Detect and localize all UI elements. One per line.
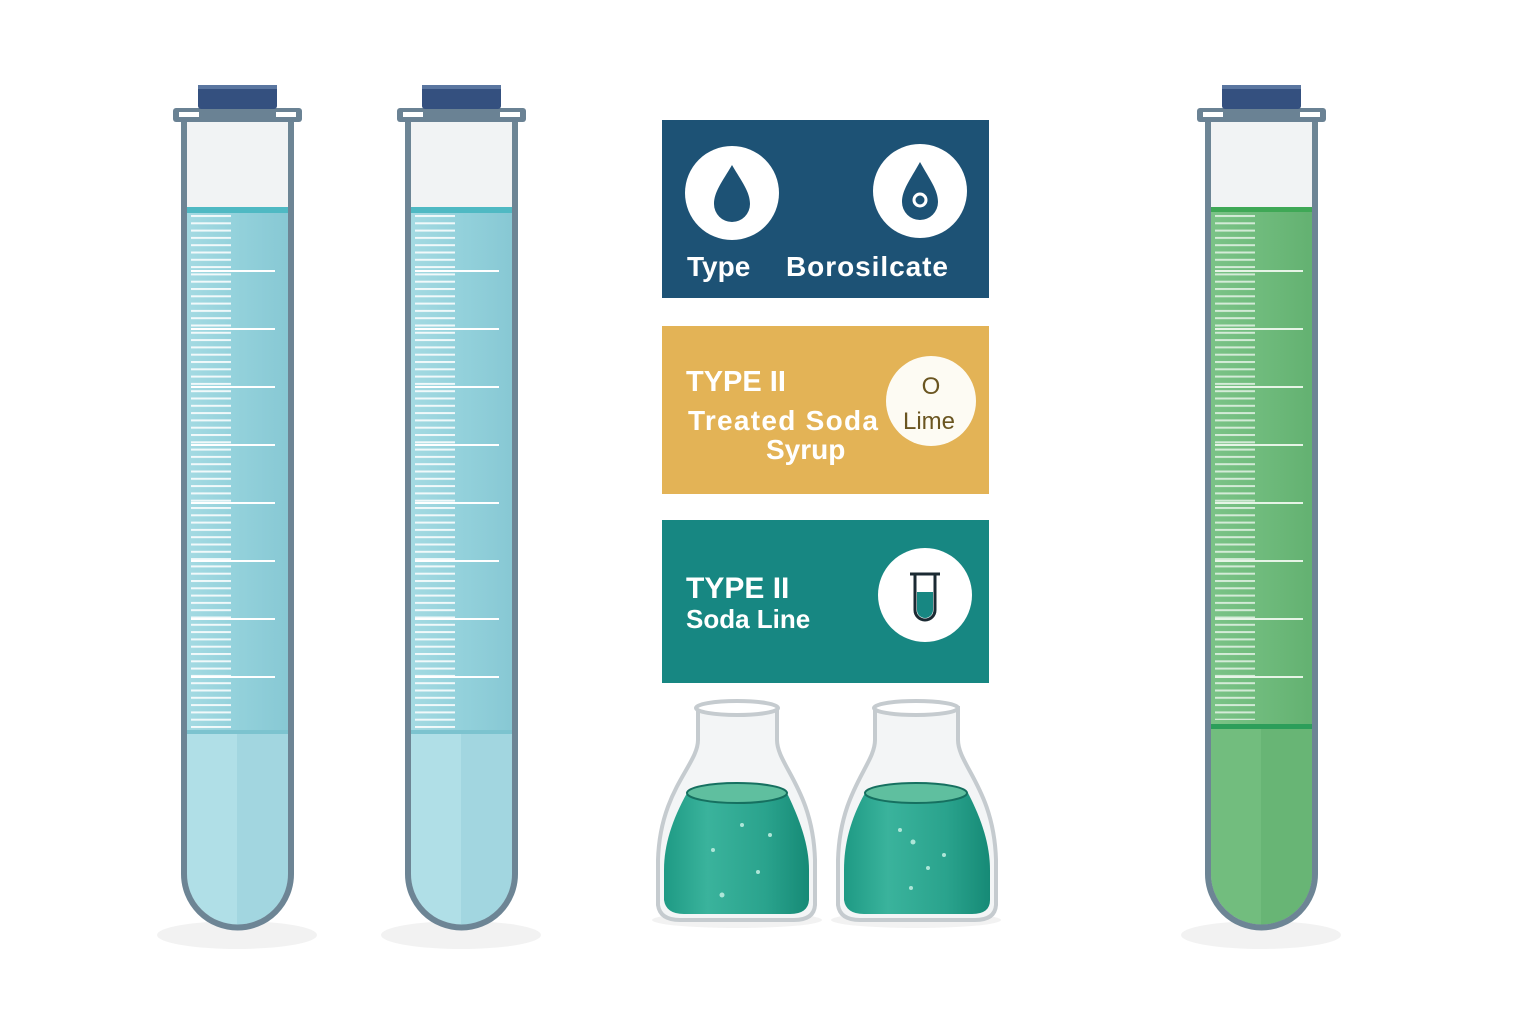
icon: water drop xyxy=(685,146,779,240)
icon: lime badge: O xyxy=(922,373,940,400)
label: Type Borosilcate: Type xyxy=(687,251,750,282)
panel: type II soda line xyxy=(662,520,989,683)
heading: TYPE II: TYPE II xyxy=(686,366,786,398)
heading: TYPE II: TYPE II xyxy=(686,572,789,605)
icon: test tube xyxy=(878,548,972,642)
panel: type II treated soda: Syrup xyxy=(766,434,845,465)
flask: left xyxy=(652,701,822,928)
flask: right xyxy=(831,701,1001,928)
tube: blue middle xyxy=(381,85,541,972)
panel: type borosilicate xyxy=(662,120,989,298)
icon: lime badge xyxy=(886,356,976,446)
text: Treated Soda Syrup: Treated Soda xyxy=(688,405,878,436)
icon: drop with ring xyxy=(873,144,967,238)
icon: lime badge: Lime xyxy=(903,408,955,435)
panel: type II treated soda xyxy=(662,326,989,494)
tube: green right xyxy=(1181,85,1341,967)
text: Soda Line: Soda Line xyxy=(686,604,810,634)
panel: type borosilicate: Borosilcate xyxy=(786,251,948,282)
tube: blue left xyxy=(157,85,317,972)
